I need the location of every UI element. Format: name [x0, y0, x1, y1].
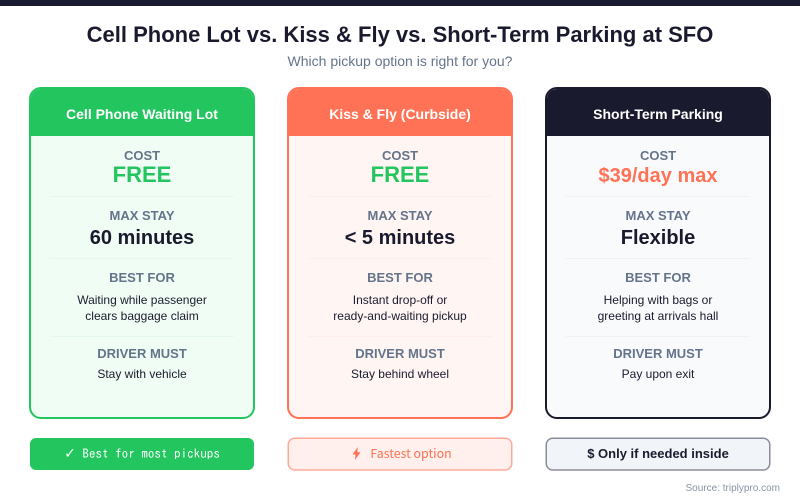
badge: best for most pickups: ✓ Best for most pickups [64, 446, 220, 462]
panel header: Kiss & Fly (Curbside) [329, 106, 471, 122]
cost value: $39/day max [598, 165, 717, 187]
badge: fastest option [288, 438, 512, 471]
cost label: COST [382, 148, 418, 163]
badge: only if needed inside [546, 438, 770, 471]
subtitle: Which pickup option is right for you? [288, 53, 512, 69]
panel header: Short-Term Parking [593, 106, 723, 122]
max stay label: MAX STAY [109, 208, 174, 223]
panel: cell phone waiting lot [29, 87, 255, 419]
panel header: Cell Phone Waiting Lot [66, 106, 218, 122]
driver must label: DRIVER MUST [613, 346, 703, 361]
driver must label: DRIVER MUST [97, 346, 187, 361]
driver must text: Stay with vehicle [97, 367, 187, 381]
badge: best for most pickups [30, 438, 254, 470]
max stay label: MAX STAY [367, 208, 432, 223]
panel header [287, 87, 513, 136]
driver must text: Pay upon exit [622, 367, 694, 381]
best for text: Waiting while passenger clears baggage claim [77, 293, 207, 323]
max stay value: Flexible [621, 227, 695, 249]
panel: kiss and fly [287, 87, 513, 419]
max stay value: < 5 minutes [345, 227, 455, 249]
cost value: FREE [113, 162, 171, 187]
best for label: BEST FOR [109, 270, 175, 285]
best for text: Helping with bags or greeting at arrivals hall [598, 293, 718, 323]
source: Source: triplypro.com [686, 483, 780, 494]
best for text: Instant drop-off or ready-and-waiting pickup [333, 293, 467, 323]
best for label: BEST FOR [625, 270, 691, 285]
cost label: COST [640, 148, 676, 163]
top bar [0, 0, 800, 6]
title: Cell Phone Lot vs. Kiss & Fly vs. Short-Term Parking at SFO [87, 22, 713, 47]
driver must text: Stay behind wheel [351, 367, 449, 381]
panel: short-term parking [545, 87, 771, 419]
max stay label: MAX STAY [625, 208, 690, 223]
panel header [545, 87, 771, 136]
best for label: BEST FOR [367, 270, 433, 285]
max stay value: 60 minutes [90, 227, 194, 249]
driver must label: DRIVER MUST [355, 346, 445, 361]
badge: only if needed inside: $ Only if needed inside [587, 446, 729, 461]
badge: fastest option: Fastest option [370, 444, 452, 462]
panel header [29, 87, 255, 136]
icon: lightning bolt [352, 447, 360, 460]
cost label: COST [124, 148, 160, 163]
cost value: FREE [371, 162, 429, 187]
